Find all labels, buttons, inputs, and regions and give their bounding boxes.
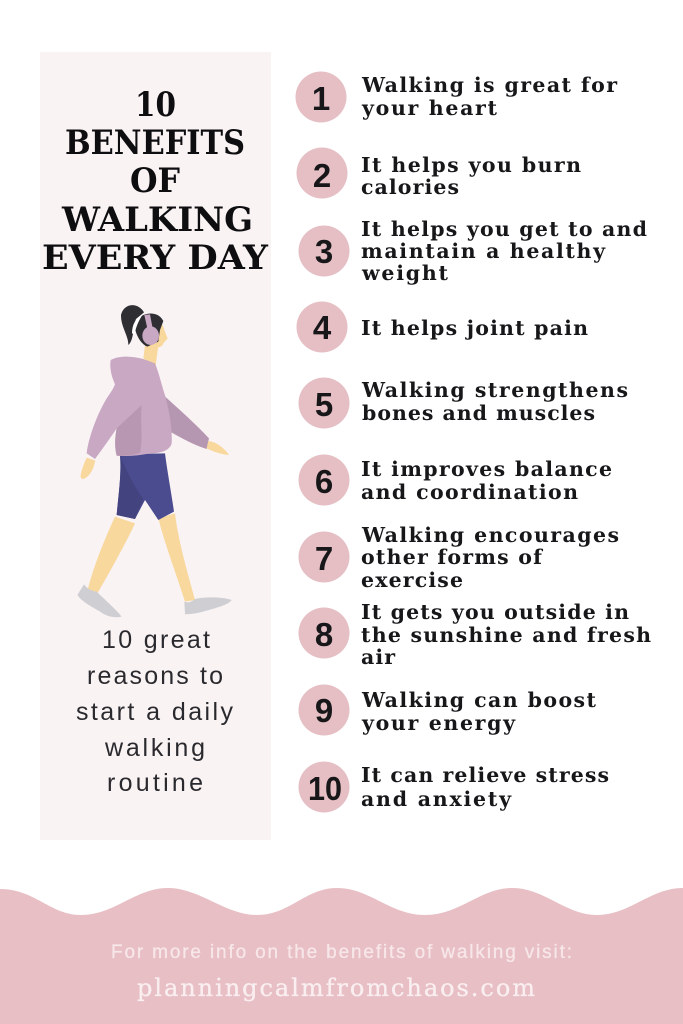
title: WALKING <box>61 200 253 240</box>
benefit 6: and coordination <box>361 480 578 504</box>
footer prompt: For more info on the benefits of walking visit: <box>111 942 572 963</box>
benefit 9: Walking can boost <box>361 688 597 712</box>
benefit 3: It helps you get to and <box>361 217 647 241</box>
benefit 4: 4 <box>313 309 332 346</box>
benefit 2: 2 <box>313 157 331 194</box>
benefit 2 <box>296 148 581 199</box>
benefit 1: your heart <box>361 96 498 120</box>
benefit 10: 10 <box>308 770 342 807</box>
title: BENEFITS <box>65 123 245 163</box>
footer url: planningcalmfromchaos.com <box>137 974 535 1002</box>
benefit 8: It gets you outside in <box>361 600 629 624</box>
benefit 6: It improves balance <box>361 457 612 481</box>
benefit 3: 3 <box>315 233 333 270</box>
benefit 4 <box>296 302 588 352</box>
benefit 5: Walking strengthens <box>361 378 628 402</box>
benefit 5 <box>298 378 628 428</box>
title: OF <box>130 161 180 201</box>
benefit 5: bones and muscles <box>362 401 595 425</box>
benefit 8: air <box>361 645 396 669</box>
benefit 2: calories <box>361 175 459 199</box>
benefit 3: weight <box>361 261 449 285</box>
title: EVERY DAY <box>42 238 269 278</box>
subtitle: routine <box>107 769 203 797</box>
benefit 10 <box>298 762 609 812</box>
title <box>42 85 269 278</box>
subtitle: start a daily <box>76 698 234 726</box>
benefit 3: maintain a healthy <box>361 239 606 263</box>
panel: left sidebar <box>40 52 271 840</box>
benefit 10: It can relieve stress <box>361 763 609 787</box>
subtitle: 10 great <box>102 626 210 654</box>
benefit 8 <box>298 600 651 669</box>
benefit 1 <box>296 72 618 122</box>
benefit 9: your energy <box>361 711 516 735</box>
benefit 7: 7 <box>315 540 333 577</box>
title: 10 <box>135 85 176 125</box>
icon: walking woman with headphones <box>77 305 232 617</box>
benefit 4: It helps joint pain <box>361 316 588 340</box>
footer banner <box>0 888 683 1024</box>
benefit 3 <box>298 217 647 285</box>
benefit 7: other forms of <box>361 545 543 569</box>
subtitle <box>76 626 234 797</box>
benefit 7: exercise <box>361 568 463 592</box>
benefit 1: Walking is great for <box>361 73 618 97</box>
benefit 8: 8 <box>315 616 333 653</box>
benefit 6: 6 <box>315 463 333 500</box>
benefit 10: and anxiety <box>361 787 512 811</box>
benefit 5: 5 <box>315 386 333 423</box>
benefit 8: the sunshine and fresh <box>361 623 651 647</box>
benefit 7: Walking encourages <box>361 523 619 547</box>
subtitle: reasons to <box>87 662 223 690</box>
benefit 9 <box>298 684 597 736</box>
benefit 1: 1 <box>312 80 330 117</box>
benefit 7 <box>298 523 619 592</box>
benefit 2: It helps you burn <box>361 153 581 177</box>
benefit 6 <box>298 454 612 506</box>
benefit 9: 9 <box>315 692 333 729</box>
subtitle: walking <box>104 734 205 762</box>
